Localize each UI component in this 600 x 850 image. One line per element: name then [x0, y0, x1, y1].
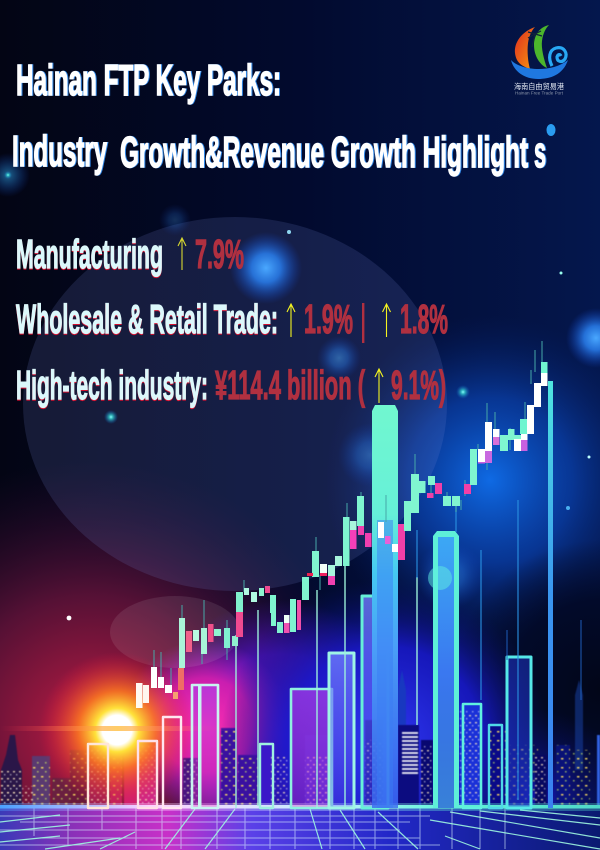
row: high-tech industry: High-tech industry:	[16, 362, 208, 408]
logo	[511, 25, 568, 96]
logo green sail	[534, 25, 549, 68]
row: manufacturing: 7.9%	[195, 231, 244, 277]
row: high-tech industry: ¥114.4 billion (	[215, 362, 365, 408]
infographic canvas: s	[534, 128, 546, 177]
row: wholesale and retail: Wholesale & Retail Trade:	[16, 296, 278, 342]
sun flare	[0, 652, 235, 808]
row: wholesale and retail: 1.9%	[304, 296, 353, 342]
logo english name: Hainan Free Trade Port	[515, 90, 564, 96]
logo boat	[511, 60, 568, 79]
logo wave	[550, 48, 566, 66]
arrow up	[382, 304, 390, 337]
arrow up	[375, 369, 383, 403]
arrow up	[287, 304, 295, 337]
candle wicks	[154, 341, 542, 686]
logo chinese name: 海南自由贸易港	[514, 81, 564, 91]
arrow up	[178, 238, 186, 270]
translucent circle panel	[23, 217, 447, 591]
tall thin bar	[548, 381, 553, 808]
outlined bars	[88, 596, 531, 808]
bokeh lights	[0, 124, 600, 620]
logo red sail	[515, 27, 535, 69]
skyline right (blue zone)	[260, 670, 600, 807]
perspective floor grid	[0, 803, 600, 850]
skyline left (red zone)	[0, 728, 258, 807]
row: manufacturing: Manufacturing	[16, 231, 163, 277]
candle bodies	[136, 362, 548, 708]
row: high-tech industry: 9.1%)	[391, 362, 446, 408]
title line 1: Hainan FTP Key Parks:	[16, 56, 281, 105]
row: wholesale and retail: 1.8%	[400, 296, 448, 342]
title line 2: Industry	[12, 127, 107, 176]
second filled bar	[428, 531, 459, 808]
separator	[362, 303, 364, 343]
candlestick chart	[136, 341, 548, 708]
thin vertical lines	[236, 500, 581, 808]
translucent small ellipse	[110, 596, 240, 668]
logo palm	[528, 31, 542, 47]
main filled bar	[372, 405, 398, 808]
